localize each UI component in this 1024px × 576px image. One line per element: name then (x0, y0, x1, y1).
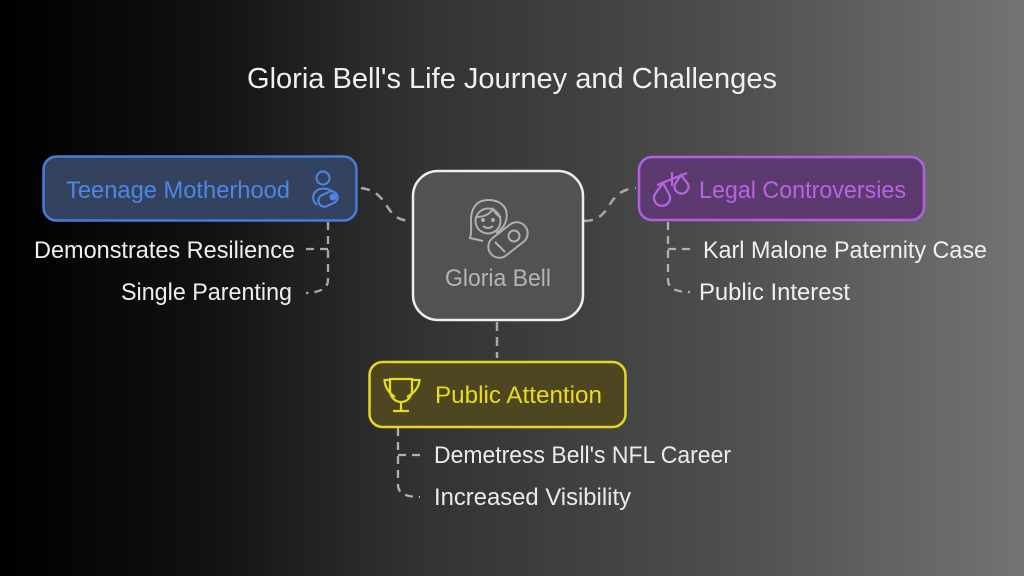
label: Legal Controversies: Legal Controversies (699, 177, 906, 204)
text: Demonstrates Resilience: Demonstrates Resilience (34, 237, 295, 264)
text: Demetress Bell's NFL Career: Demetress Bell's NFL Career (434, 442, 731, 469)
panel: Public Attention (370, 362, 626, 427)
icon: trophy (384, 379, 420, 411)
title: Gloria Bell's Life Journey and Challenges (247, 63, 777, 95)
text: Increased Visibility: Increased Visibility (434, 484, 632, 511)
icon: mother and baby (313, 172, 340, 209)
panel: Legal Controversies (639, 157, 924, 220)
connector: center to Public Attention (496, 322, 498, 358)
connector: Teenage Motherhood to center (361, 188, 412, 221)
text: Public Interest: Public Interest (699, 279, 850, 306)
branch: Legal Controversies sub-items (668, 222, 692, 292)
branch: Teenage Motherhood sub-items (306, 222, 328, 293)
text: Single Parenting: Single Parenting (121, 279, 292, 306)
label: Gloria Bell: Gloria Bell (445, 265, 551, 292)
text: Karl Malone Paternity Case: Karl Malone Paternity Case (703, 237, 987, 264)
branch: Public Attention sub-items (398, 428, 420, 497)
panel: center Gloria Bell (413, 171, 583, 320)
panel: Teenage Motherhood (44, 156, 356, 220)
icon: mother with baby (470, 200, 532, 262)
connector: Legal Controversies to center (584, 188, 636, 221)
label: Teenage Motherhood: Teenage Motherhood (66, 177, 290, 204)
label: Public Attention: Public Attention (435, 382, 602, 409)
icon: scales (654, 172, 688, 206)
